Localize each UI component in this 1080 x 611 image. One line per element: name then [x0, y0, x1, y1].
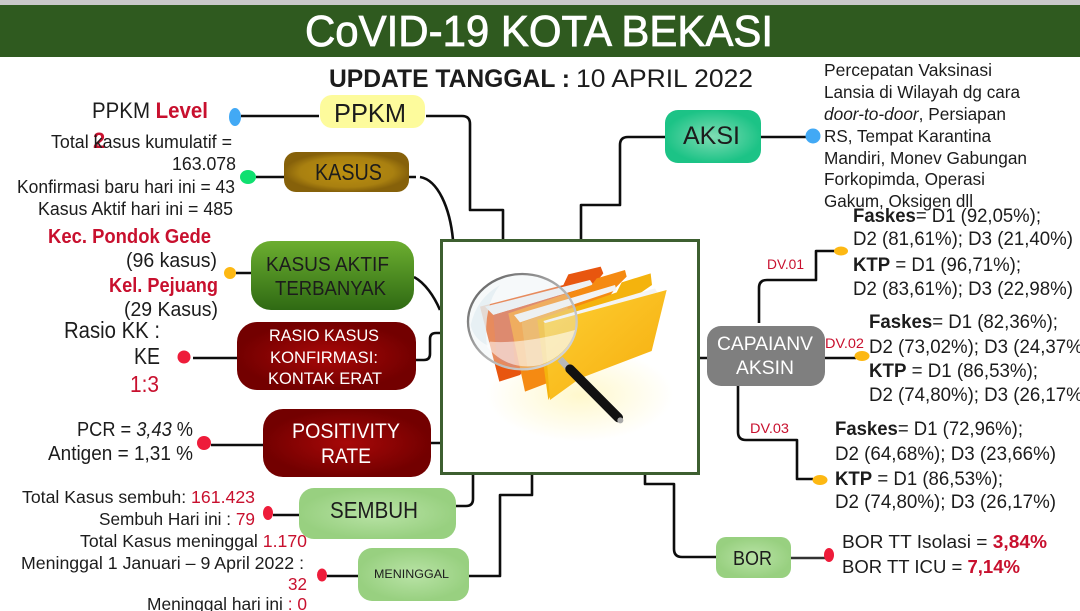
- text: DV.02: Faskes= D1 (82,36%);: [869, 312, 1058, 333]
- node: MENINGGAL: MENINGGAL: [374, 567, 449, 581]
- node: RASIO KASUS: [237, 322, 416, 390]
- text: KASUS: Kasus Aktif hari ini = 485: [38, 199, 233, 219]
- node: CAPAIAN VAKSIN: [707, 326, 825, 386]
- text: PPKM level: [92, 98, 208, 153]
- node: KASUS: [284, 152, 409, 192]
- text: KASUS AKTIF: [48, 226, 218, 321]
- text: POSITIVITY: [48, 419, 193, 465]
- node: RASIO KASUS: RASIO KASUS: [269, 326, 379, 345]
- text: KASUS: 163.078: [172, 154, 236, 174]
- node: POSITIVITY RATE: POSITIVITY: [292, 420, 400, 443]
- text: DV.01: D2 (81,61%); D3 (21,40%): [853, 229, 1073, 250]
- text: DV.03: D2 (64,68%); D3 (23,66%): [835, 444, 1056, 465]
- text: SEMBUH and MENINGGAL: Meninggal 1 Januari – 9 April 2022 :: [21, 553, 304, 573]
- text: RASIO: Rasio KK :: [64, 317, 160, 343]
- dot: DV.03: [812, 475, 828, 485]
- text: AKSI: Lansia di Wilayah dg cara: [824, 82, 1020, 102]
- node: CAPAIAN VAKSIN: AKSIN: [736, 358, 794, 379]
- text: KASUS: Total kasus kumulatif =: [51, 132, 232, 152]
- dot: DV.01: [834, 246, 848, 256]
- dot: PPKM: [229, 108, 241, 126]
- node: CAPAIAN VAKSIN: CAPAIANV: [717, 334, 813, 355]
- dot: KASUS: [240, 170, 256, 184]
- text: SEMBUH and MENINGGAL: 32: [288, 574, 307, 594]
- node: SEMBUH: [299, 488, 456, 539]
- text: AKSI: [824, 60, 1027, 211]
- label: DV.01: DV.01: [767, 257, 804, 272]
- node: RASIO KASUS: KONTAK ERAT: [268, 369, 382, 388]
- text: AKSI: RS, Tempat Karantina: [824, 126, 991, 146]
- text: KASUS AKTIF: (96 kasus): [126, 250, 217, 272]
- text: BOR: BOR TT ICU = 7,14%: [842, 557, 1020, 577]
- text: POSITIVITY: Antigen = 1,31 %: [48, 443, 193, 465]
- text: RASIO: KE: [134, 343, 160, 369]
- text: SEMBUH and MENINGGAL: [21, 487, 307, 611]
- text: DV.01: Faskes= D1 (92,05%);: [853, 206, 1041, 227]
- node: SEMBUH: SEMBUH: [330, 497, 418, 523]
- label: DV.02: DV.02: [825, 336, 864, 351]
- node: AKSI: [665, 110, 761, 163]
- text: KASUS: [17, 132, 236, 219]
- text: AKSI: Gakum, Oksigen dll: [824, 191, 973, 211]
- node: POSITIVITY RATE: RATE: [321, 445, 371, 468]
- text: DV.03: [835, 419, 1056, 513]
- update date: 10 APRIL 2022: [576, 65, 753, 93]
- update date: UPDATE TANGGAL :: [329, 65, 570, 93]
- node: PPKM: [320, 95, 425, 128]
- icon: folders and magnifying glass: [468, 267, 673, 442]
- node: KASUS AKTIF TERBANYAK: TERBANYAK: [275, 278, 387, 300]
- connector lines: [193, 116, 856, 576]
- dot: POSITIVITY: [197, 436, 211, 450]
- text: KASUS AKTIF: Kel. Pejuang: [109, 275, 218, 297]
- text: SEMBUH and MENINGGAL: Total Kasus meninggal 1.170: [80, 531, 307, 551]
- update date: [329, 65, 753, 93]
- text: DV.01: KTP = D1 (96,71%);: [853, 255, 1021, 276]
- top grey strip: [0, 0, 1080, 5]
- text: RASIO: 1:3: [130, 371, 159, 397]
- dot: KASUS AKTIF: [224, 267, 236, 279]
- text: KASUS: Konfirmasi baru hari ini = 43: [17, 177, 235, 197]
- node: RASIO KASUS: KONFIRMASI:: [270, 348, 378, 367]
- text: KASUS AKTIF: (29 Kasus): [124, 299, 218, 321]
- text: DV.03: D2 (74,80%); D3 (26,17%): [835, 492, 1056, 513]
- text: BOR: BOR TT Isolasi = 3,84%: [842, 532, 1047, 552]
- text: SEMBUH and MENINGGAL: Sembuh Hari ini : 79: [99, 509, 255, 529]
- text: AKSI: Mandiri, Monev Gabungan: [824, 148, 1027, 168]
- text: POSITIVITY: PCR = 3,43 %: [77, 419, 193, 441]
- text: PPKM level: PPKM Level: [92, 98, 208, 123]
- title banner: [0, 5, 1080, 57]
- text: DV.01: [853, 206, 1073, 300]
- node: KASUS AKTIF TERBANYAK: KASUS AKTIF: [266, 254, 389, 276]
- title banner: CoVID-19 KOTA BEKASI: [305, 7, 773, 56]
- text: AKSI: door-to-door, Persiapan: [824, 104, 1006, 124]
- text: RASIO: [64, 317, 160, 397]
- dot: MENINGGAL: [317, 568, 327, 582]
- text: PPKM level: 2: [93, 128, 105, 153]
- dot: AKSI: [806, 128, 820, 144]
- node: BOR: BOR: [733, 548, 772, 570]
- text: DV.03: KTP = D1 (86,53%);: [835, 469, 1003, 490]
- text: KASUS AKTIF: Kec. Pondok Gede: [48, 226, 211, 248]
- text: DV.03: Faskes= D1 (72,96%);: [835, 419, 1023, 440]
- dot: BOR: [824, 548, 834, 562]
- node: POSITIVITY RATE: [263, 409, 431, 477]
- node: KASUS AKTIF TERBANYAK: [251, 241, 414, 310]
- text: AKSI: Forkopimda, Operasi: [824, 169, 985, 189]
- dot: SEMBUH: [263, 506, 273, 520]
- text: AKSI: Percepatan Vaksinasi: [824, 60, 992, 80]
- dot: DV.02: [854, 351, 870, 361]
- text: DV.01: D2 (83,61%); D3 (22,98%): [853, 279, 1073, 300]
- node: MENINGGAL: [358, 548, 469, 601]
- node: KASUS: KASUS: [315, 159, 382, 185]
- text: DV.02: [869, 312, 1080, 406]
- node: BOR: [716, 537, 791, 578]
- text: SEMBUH and MENINGGAL: Total Kasus sembuh: 161.423: [22, 487, 255, 507]
- text: DV.02: KTP = D1 (86,53%);: [869, 361, 1038, 382]
- panel: central image: [442, 240, 698, 474]
- dot: RASIO: [178, 350, 190, 364]
- node: AKSI: AKSI: [683, 122, 740, 150]
- node: PPKM: PPKM: [334, 98, 406, 128]
- text: BOR: [842, 532, 1047, 577]
- label: DV.03: DV.03: [750, 421, 789, 436]
